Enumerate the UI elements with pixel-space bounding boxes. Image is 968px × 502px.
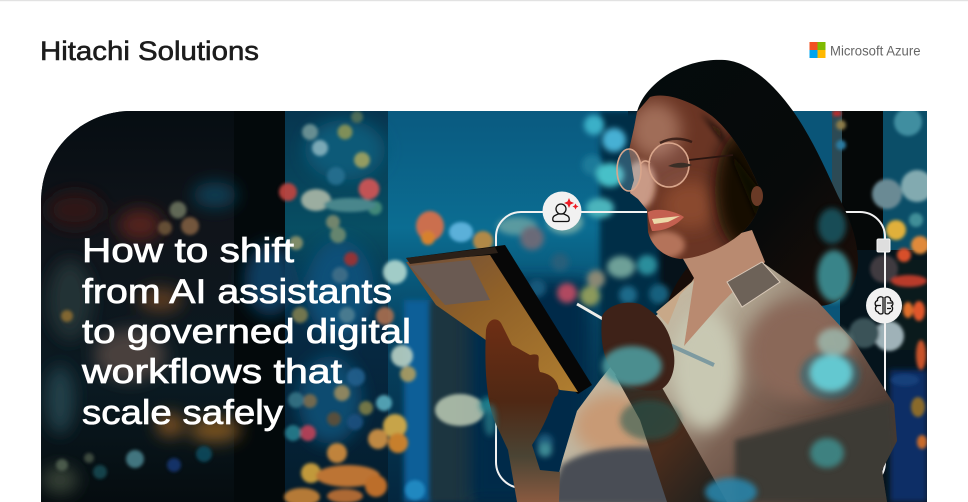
bokeh lights over the person: [484, 208, 860, 502]
title: to governed digital: [82, 313, 411, 351]
top rule: [0, 0, 968, 1]
title: [81, 232, 411, 432]
ear: [751, 186, 763, 206]
bokeh at the right edge: [833, 108, 933, 449]
bokeh behind the frame area: [480, 115, 669, 457]
right forearm: [615, 375, 727, 502]
tablet: [406, 245, 592, 394]
hair: [637, 60, 858, 306]
brow: [660, 139, 692, 143]
pale chest: [671, 310, 739, 430]
pen: [577, 304, 714, 365]
logo: Hitachi Solutions: Hitachi Solutions: [40, 36, 259, 66]
right hand: [601, 303, 674, 391]
glasses: [617, 143, 733, 191]
hero photo background: night city bokeh: [41, 108, 933, 502]
shirt collar: [727, 262, 780, 307]
woman with tablet: [406, 60, 900, 502]
face: [629, 96, 759, 259]
eye: [668, 163, 692, 168]
frame node: square connector: [877, 239, 890, 252]
title: workflows that: [81, 353, 343, 391]
workflow frame outline: [496, 212, 885, 488]
title: scale safely: [82, 394, 283, 432]
dark sleeve fold: [735, 400, 900, 502]
lower left shadow: [559, 443, 667, 502]
left hand and forearm: [485, 319, 560, 502]
icon: AI brain: [866, 288, 902, 324]
warm left chest: [573, 393, 657, 457]
hair lower left wisps: [668, 256, 700, 304]
logo: Microsoft Azure: Microsoft Azure: [830, 42, 921, 58]
mouth: [648, 210, 684, 231]
shoulder shade: [748, 300, 852, 400]
shirt body: [540, 255, 900, 502]
icon: user with sparkles: [542, 192, 582, 230]
left dim bokeh: [42, 120, 385, 494]
title: from AI assistants: [82, 273, 392, 311]
title: How to shift: [82, 232, 295, 270]
sharp bokeh lights: [56, 111, 493, 502]
neck: [668, 230, 765, 346]
